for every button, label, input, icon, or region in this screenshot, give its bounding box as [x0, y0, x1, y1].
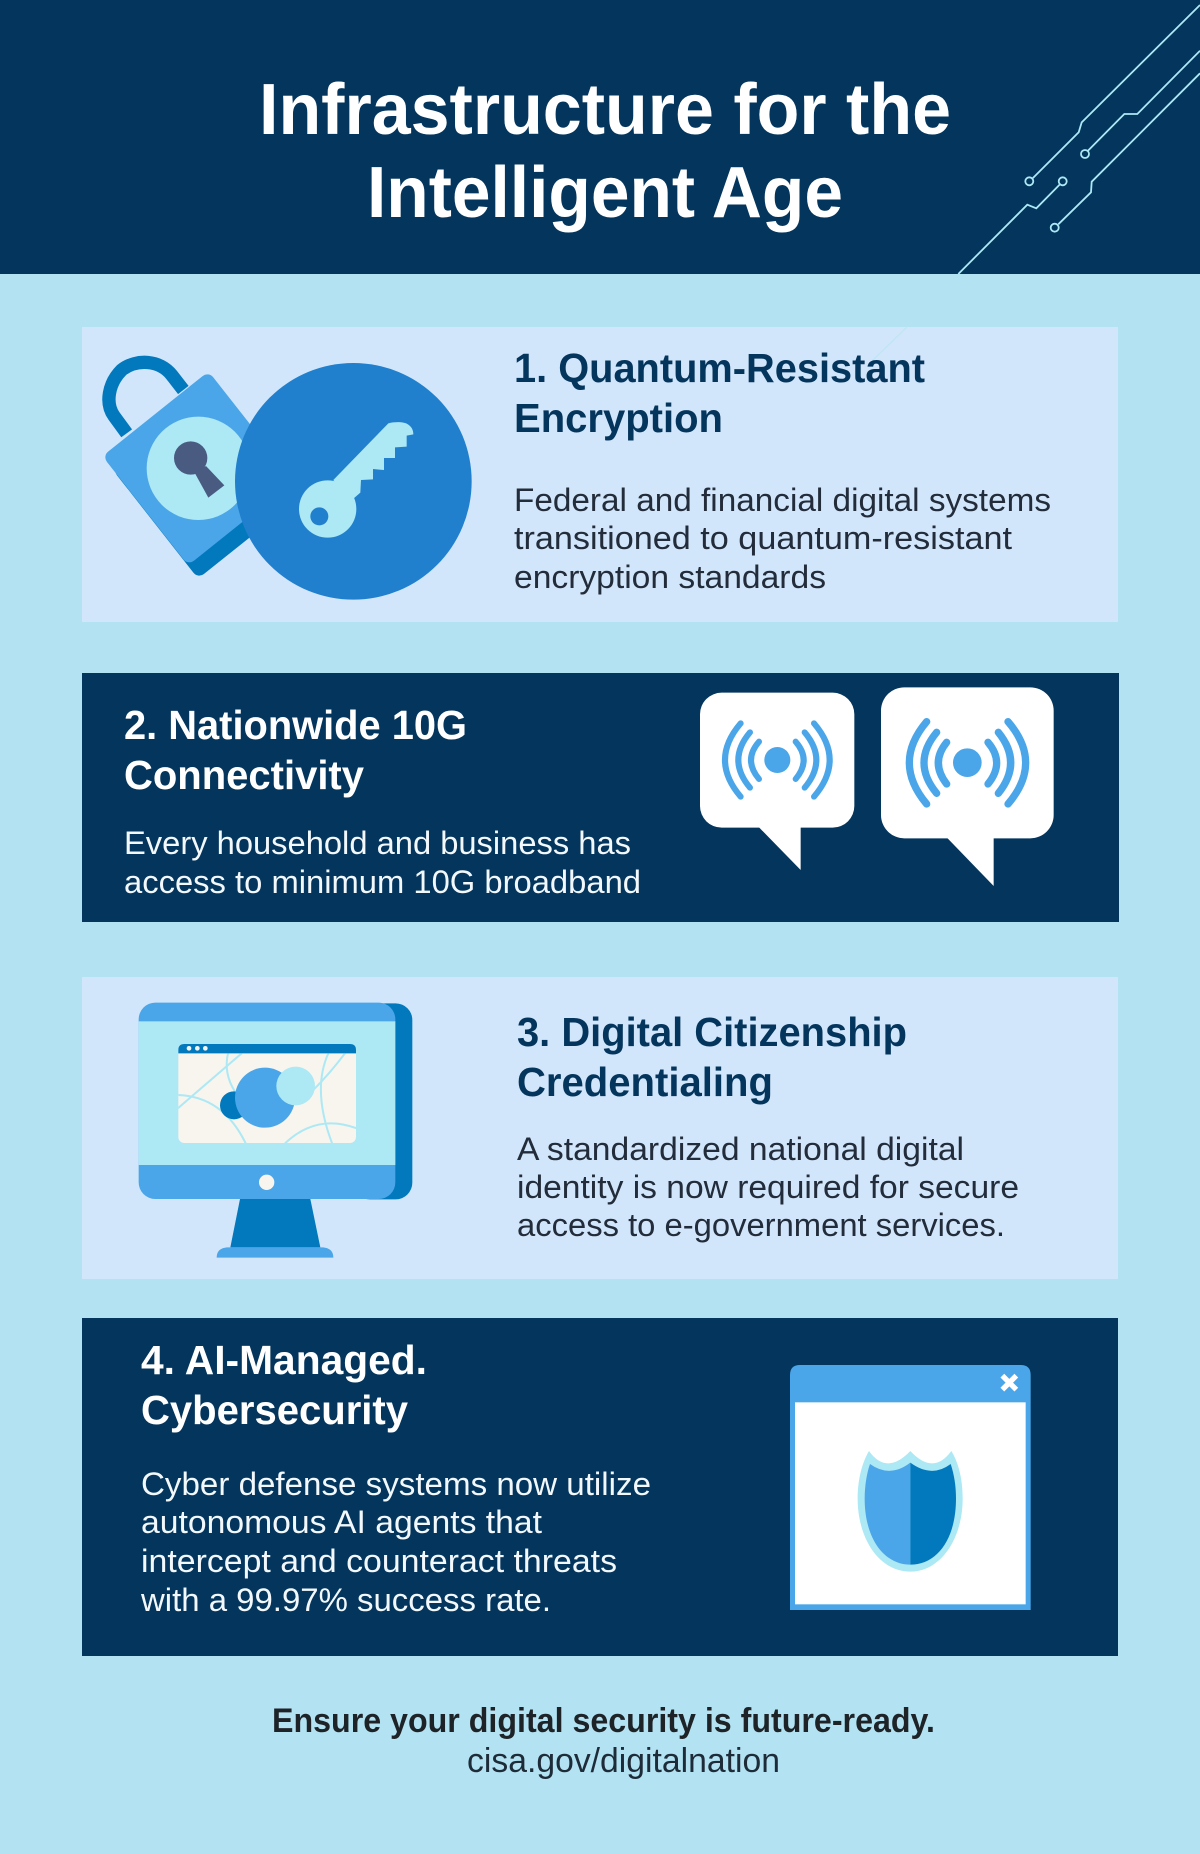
body text: autonomous AI agents that — [141, 1504, 542, 1540]
body text — [517, 1131, 1019, 1243]
heading: 3. Digital Citizenship — [517, 1009, 907, 1055]
heading: Encryption — [514, 395, 723, 441]
heading — [141, 1337, 427, 1433]
title: Infrastructure for the — [259, 70, 951, 150]
circuit lines decoration — [958, 5, 1200, 274]
title: Intelligent Age — [367, 153, 843, 233]
panel 4: AI-managed cybersecurity — [82, 1318, 1118, 1656]
footer call to action: Ensure your digital security is future-ready. — [272, 1702, 935, 1740]
body text: access to e-government services. — [517, 1207, 1005, 1243]
panel 2: nationwide 10G connectivity — [82, 673, 1119, 922]
footer call to action: cisa.gov/digitalnation — [467, 1742, 780, 1780]
signal bubble large — [881, 687, 1054, 886]
body text: Every household and business has — [124, 825, 631, 861]
icon: computer monitor — [139, 1003, 412, 1258]
body text: access to minimum 10G broadband — [124, 864, 641, 900]
heading — [514, 345, 925, 441]
panel 3: digital citizenship credentialing — [82, 977, 1118, 1279]
icon: signal speech bubbles — [700, 687, 1054, 886]
heading — [124, 702, 467, 798]
shield — [858, 1451, 963, 1572]
heading: 2. Nationwide 10G — [124, 702, 467, 748]
body text: Federal and financial digital systems — [514, 482, 1051, 518]
body text: identity is now required for secure — [517, 1169, 1019, 1205]
body text — [124, 825, 641, 900]
body text: intercept and counteract threats — [141, 1543, 617, 1579]
footer call to action — [272, 1702, 935, 1780]
body text — [514, 482, 1051, 595]
body text: encryption standards — [514, 559, 826, 595]
heading: 4. AI-Managed. — [141, 1337, 427, 1383]
body text — [140, 1466, 651, 1618]
icon: padlock and key — [109, 362, 472, 600]
header band — [0, 0, 1200, 274]
title — [259, 70, 951, 233]
heading: Credentialing — [517, 1059, 773, 1105]
heading — [517, 1009, 907, 1105]
signal bubble small — [700, 693, 854, 870]
body text: with a 99.97% success rate. — [140, 1582, 551, 1618]
heading: 1. Quantum-Resistant — [514, 345, 925, 391]
icon: browser window with shield — [790, 1365, 1031, 1610]
body text: A standardized national digital — [517, 1131, 964, 1167]
body text: Cyber defense systems now utilize — [141, 1466, 651, 1502]
heading: Cybersecurity — [141, 1387, 408, 1433]
body text: transitioned to quantum-resistant — [514, 520, 1012, 556]
heading: Connectivity — [124, 752, 364, 798]
panel 1: quantum-resistant encryption — [82, 327, 1118, 622]
